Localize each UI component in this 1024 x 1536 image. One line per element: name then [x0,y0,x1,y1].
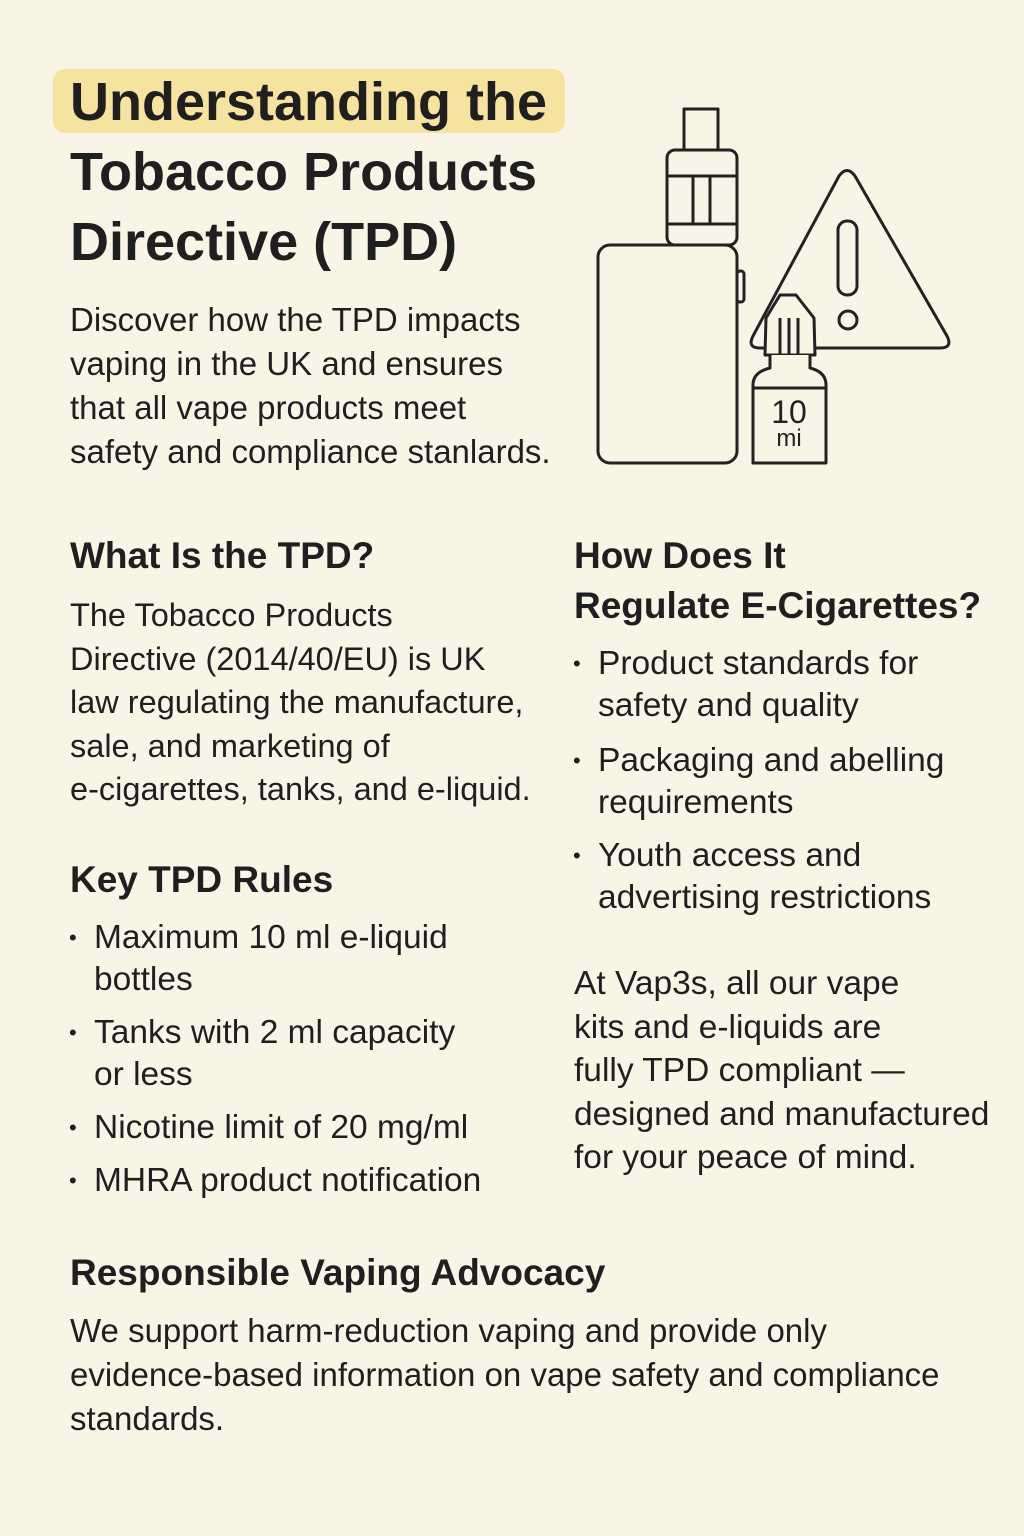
text: definition [70,597,531,807]
title: Directive (TPD) [70,212,457,272]
list: regulation: advertising restrictions [598,879,931,916]
list: key rules: MHRA product notification [94,1162,481,1199]
heading: Key TPD Rules: Key TPD Rules [70,859,333,900]
list: regulation: Youth access and [598,837,861,874]
intro text: safety and compliance stanlards. [70,433,551,470]
list: regulation [574,645,944,916]
heading: Responsible Vaping Advocacy: Responsible Vaping Advocacy [70,1252,605,1293]
list: key rules [70,919,481,1199]
list: regulation: requirements [598,784,794,821]
text: definition: e-cigarettes, tanks, and e-liquid. [70,771,531,807]
icon: vape kit, bottle and warning [596,108,950,464]
text: Vap3s compliance: for your peace of mind. [574,1139,917,1176]
text: Vap3s compliance: kits and e-liquids are [574,1008,881,1046]
heading: How Does It Regulate: How Does It [574,535,786,576]
intro text: that all vape products meet [70,389,466,426]
text: definition: law regulating the manufacture, [70,684,523,720]
heading: How Does It Regulate: Regulate E-Cigarettes? [574,585,981,626]
icon: vape kit, bottle and warning: 10 [771,394,807,430]
text: advocacy: evidence-based information on vape safety and compliance [70,1356,940,1393]
list: key rules: bottles [94,961,193,998]
text: Vap3s compliance: designed and manufactured [574,1096,989,1132]
list: key rules: Maximum 10 ml e-liquid [94,919,448,956]
list: regulation: safety and quality [598,687,859,724]
title: Tobacco Products [70,142,537,202]
text: definition: sale, and marketing of [70,728,390,764]
intro text [70,301,551,470]
list: key rules: Tanks with 2 ml capacity [94,1014,455,1051]
title: Understanding the [70,72,547,132]
text: Vap3s compliance: At Vap3s, all our vape [574,965,899,1002]
text: advocacy: We support harm-reduction vaping and provide only [70,1312,827,1349]
heading: What Is the TPD: What Is the TPD? [70,535,374,576]
list: regulation: Product standards for [598,645,918,682]
intro text: vaping in the UK and ensures [70,345,503,382]
list: key rules: or less [94,1056,193,1093]
text: definition: Directive (2014/40/EU) is UK [70,640,485,676]
icon: vape kit, bottle and warning: mi [776,425,802,452]
text: advocacy [70,1312,940,1437]
intro text: Discover how the TPD impacts [70,301,521,338]
text: Vap3s compliance [574,965,989,1176]
title [70,72,547,272]
heading: How Does It Regulate [574,535,981,626]
text: advocacy: standards. [70,1400,224,1437]
text: Vap3s compliance: fully TPD compliant — [574,1052,905,1089]
text: definition: The Tobacco Products [70,597,393,633]
title highlight [53,69,565,133]
list: key rules: Nicotine limit of 20 mg/ml [94,1109,468,1146]
list: regulation: Packaging and abelling [598,742,944,779]
